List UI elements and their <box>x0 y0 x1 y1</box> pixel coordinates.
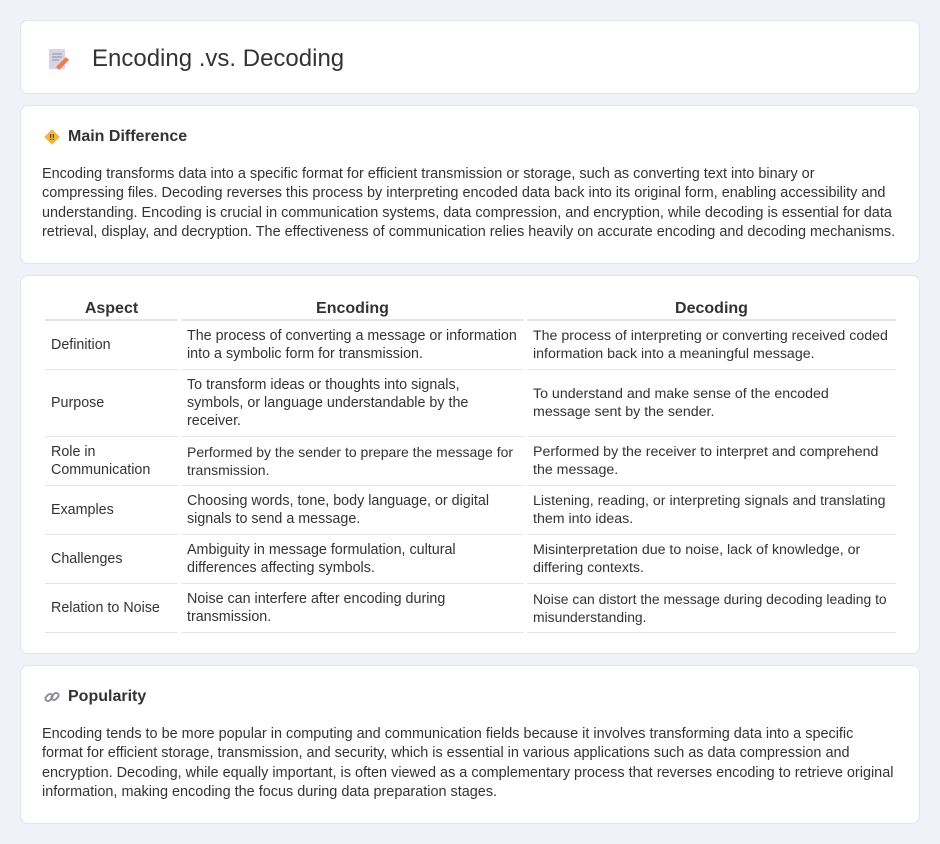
comparison table: Encoding <box>316 300 389 316</box>
comparison table: Performed by the receiver to interpret and comprehend the message. <box>533 444 878 478</box>
text block: Encoding tends to be more popular in computing and communication fields because it involves transforming data into a specific format for efficient storage, transmission, and security, which is essential in various applications such as data compression and encryption. Decoding, while equally important, is often viewed as a complementary process that reverses encoding to retrieve original information, making encoding the focus during data preparation stages. <box>42 726 893 800</box>
text block: Encoding transforms data into a specific format for efficient transmission or storage, such as converting text into binary or compressing files. Decoding reverses this process by interpreting encoded data back into its original form, enabling accessibility and understanding. Encoding is crucial in communication systems, data compression, and encryption, while decoding is essential for data retrieval, display, and decryption. The effectiveness of communication relies heavily on accurate encoding and decoding mechanisms. <box>42 166 895 240</box>
header card <box>20 20 920 94</box>
comparison table: Performed by the sender to prepare the message for transmission. <box>187 444 513 478</box>
title: Encoding .vs. Decoding <box>92 45 344 72</box>
comparison table: Relation to Noise <box>51 600 160 616</box>
comparison table: The process of interpreting or converting received coded information back into a meaningful message. <box>533 328 888 362</box>
comparison table: Role in Communication <box>51 444 150 478</box>
comparison table: Choosing words, tone, body language, or digital signals to send a message. <box>187 493 489 527</box>
comparison table: The process of converting a message or information into a symbolic form for transmission. <box>187 328 517 362</box>
comparison table: Examples <box>51 502 114 518</box>
comparison table: Noise can interfere after encoding during transmission. <box>187 591 445 625</box>
panel: popularity <box>20 665 920 824</box>
panel: comparison table <box>20 275 920 654</box>
comparison table: To understand and make sense of the encoded message sent by the sender. <box>533 386 829 420</box>
comparison table: Definition <box>51 337 111 353</box>
heading: !! <box>49 133 55 142</box>
comparison table: Ambiguity in message formulation, cultural differences affecting symbols. <box>187 542 456 576</box>
icon: document with pencil <box>49 49 69 70</box>
comparison table: To transform ideas or thoughts into signals, symbols, or language understandable by the receiver. <box>187 377 468 429</box>
comparison table: Noise can distort the message during decoding leading to misunderstanding. <box>533 591 887 625</box>
comparison table: Aspect <box>85 300 138 316</box>
comparison table: Misinterpretation due to noise, lack of knowledge, or differing contexts. <box>533 542 860 576</box>
panel: main difference <box>20 105 920 264</box>
comparison table <box>45 300 896 633</box>
heading: Popularity <box>68 688 146 705</box>
comparison table: Listening, reading, or interpreting signals and translating them into ideas. <box>533 493 886 527</box>
comparison table: Challenges <box>51 551 123 567</box>
heading: Main Difference <box>68 128 187 145</box>
comparison table: Purpose <box>51 395 104 411</box>
comparison table: Decoding <box>675 300 748 316</box>
